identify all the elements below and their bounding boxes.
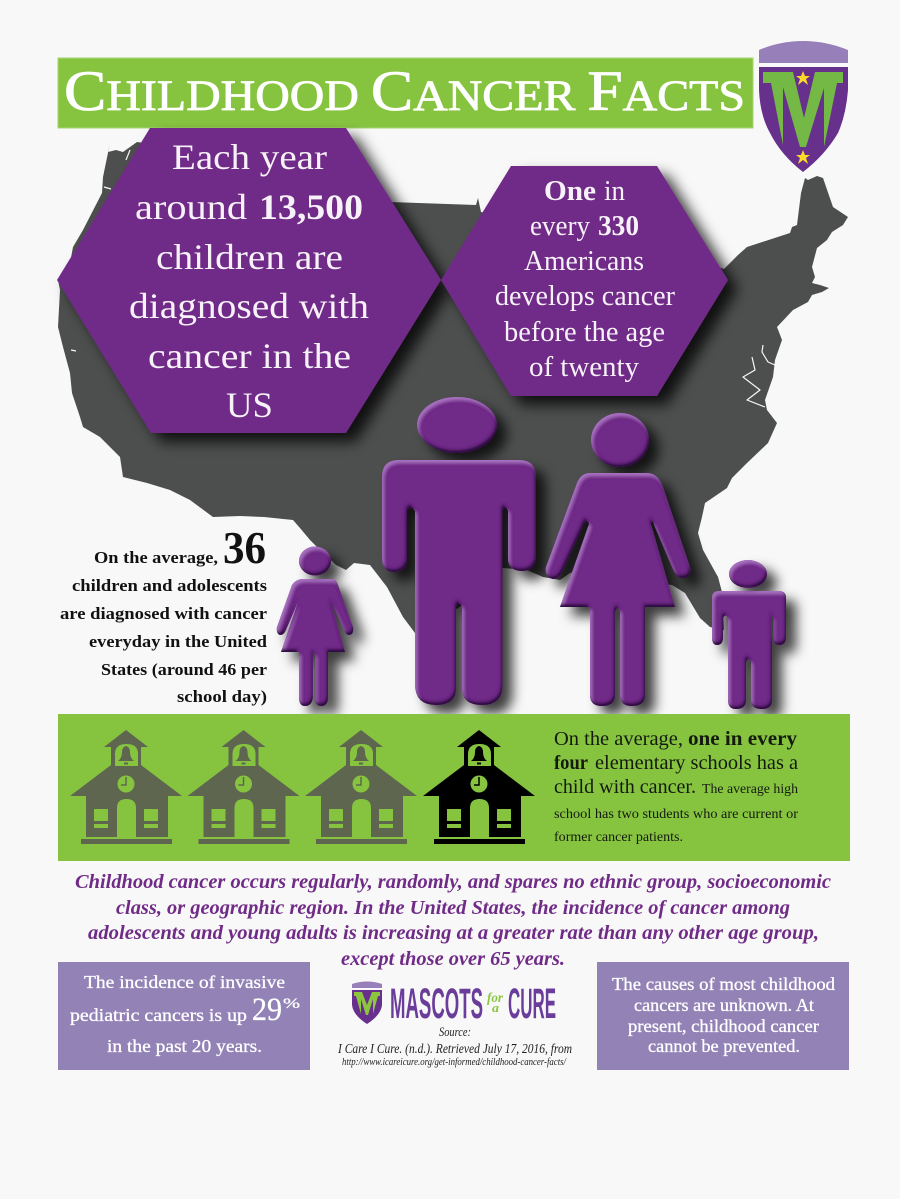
hexagon: one in every 330: develops cancer bbox=[495, 281, 676, 312]
text: one in every four schools: four bbox=[554, 752, 588, 774]
statement text: adolescents and young adults is increasing at a greater rate than any other age group, bbox=[88, 922, 819, 944]
source citation: http://www.icareicure.org/get-informed/childhood-cancer-facts/ bbox=[342, 1057, 567, 1068]
text: 36 children diagnosed every day: On the average, bbox=[94, 548, 218, 567]
logo: Mascots for a Cure bbox=[352, 980, 556, 1028]
panel: 29 percent: The incidence of invasive bbox=[84, 972, 285, 992]
text: 36 children diagnosed every day: 36 bbox=[223, 523, 266, 573]
title banner: CHILDHOOD CANCER FACTS bbox=[64, 60, 745, 123]
statement text: except those over 65 years. bbox=[341, 948, 565, 970]
hexagon: one in every 330: in bbox=[604, 176, 625, 207]
text: one in every four schools: former cancer patients. bbox=[554, 830, 683, 845]
hexagon: 13,500 children: 13,500 bbox=[259, 187, 363, 227]
text: one in every four schools: school has two students who are current or bbox=[554, 807, 798, 822]
logo shield bbox=[759, 41, 848, 172]
panel: 29 percent: 29 bbox=[252, 992, 282, 1028]
text: one in every four schools: The average high bbox=[702, 782, 798, 797]
figure: boy bbox=[712, 560, 786, 709]
logo: Mascots for a Cure: MASCOTS bbox=[390, 980, 483, 1028]
panel: schools bbox=[58, 714, 850, 861]
source citation: Source: bbox=[439, 1024, 471, 1039]
text: one in every four schools bbox=[554, 728, 798, 845]
panel: causes unknown: present, childhood cancer bbox=[628, 1016, 819, 1036]
text: 36 children diagnosed every day bbox=[60, 523, 268, 706]
hexagon: 13,500 children: Each year bbox=[172, 137, 327, 177]
text: one in every four schools: elementary schools has a bbox=[595, 752, 798, 774]
hexagon: one in every 330: every bbox=[530, 211, 590, 242]
hexagon: one in every 330: of twenty bbox=[529, 352, 639, 383]
map of the United States bbox=[58, 142, 848, 633]
icons: schoolhouses bbox=[70, 730, 535, 844]
statement text: Childhood cancer occurs regularly, randomly, and spares no ethnic group, socioeconomic bbox=[75, 871, 831, 893]
text: 36 children diagnosed every day: everyday in the United bbox=[89, 632, 268, 651]
logo: Mascots for a Cure: for bbox=[487, 991, 504, 1006]
hexagon: 13,500 children: around bbox=[135, 187, 247, 227]
panel: 29 percent bbox=[58, 962, 310, 1070]
logo: Mascots for a Cure: a bbox=[492, 1000, 500, 1015]
text: 36 children diagnosed every day: are diagnosed with cancer bbox=[60, 604, 267, 623]
hexagon: 13,500 children: diagnosed with bbox=[129, 286, 369, 326]
text: one in every four schools: On the average, bbox=[554, 728, 683, 750]
text: one in every four schools: one in every bbox=[688, 728, 797, 750]
panel: causes unknown: cancers are unknown. At bbox=[634, 995, 814, 1015]
hexagon: 13,500 children: cancer in the bbox=[148, 336, 351, 376]
figure: woman bbox=[546, 413, 690, 706]
hexagon: 13,500 children bbox=[57, 128, 441, 433]
infographic: CURE bbox=[508, 980, 556, 1028]
panel: 29 percent: in the past 20 years. bbox=[107, 1036, 262, 1056]
statement text bbox=[75, 871, 831, 970]
statement text: class, or geographic region. In the United States, the incidence of cancer among bbox=[116, 897, 790, 919]
panel: causes unknown: The causes of most childhood bbox=[612, 974, 835, 994]
panel: causes unknown: cannot be prevented. bbox=[648, 1036, 800, 1056]
panel: causes unknown bbox=[597, 962, 849, 1070]
hexagon: one in every 330 bbox=[441, 166, 728, 396]
hexagon: 13,500 children: children are bbox=[156, 237, 343, 277]
hexagon: one in every 330: 330 bbox=[598, 211, 639, 242]
source citation: I Care I Cure. (n.d.). Retrieved July 17, 2016, from bbox=[337, 1042, 572, 1057]
text: one in every four schools: child with cancer. bbox=[554, 776, 696, 798]
panel: 29 percent: % bbox=[283, 996, 300, 1012]
text: 36 children diagnosed every day: school day) bbox=[177, 687, 267, 706]
hexagon: one in every 330: Americans bbox=[524, 246, 644, 277]
text: 36 children diagnosed every day: States (around 46 per bbox=[101, 660, 267, 679]
figure: girl bbox=[277, 546, 353, 706]
panel: 29 percent: pediatric cancers is up bbox=[70, 1005, 247, 1025]
source citation bbox=[337, 1024, 572, 1068]
figure: man bbox=[382, 397, 536, 705]
text: 36 children diagnosed every day: children and adolescents bbox=[72, 576, 267, 595]
hexagon: 13,500 children: US bbox=[226, 385, 273, 425]
hexagon: one in every 330: before the age bbox=[504, 317, 665, 348]
hexagon: one in every 330: One bbox=[544, 176, 596, 207]
